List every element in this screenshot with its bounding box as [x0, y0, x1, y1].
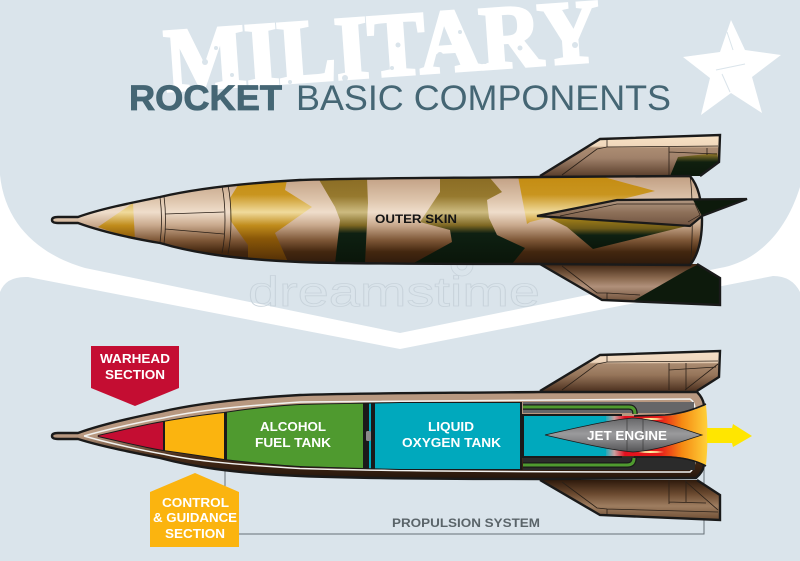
- callout: warhead section: [91, 346, 179, 406]
- callout: control and guidance section: SECTION: [165, 526, 225, 541]
- warhead compartment: [98, 422, 163, 450]
- callout: warhead section: SECTION: [105, 367, 165, 382]
- label: liquid oxygen tank: OXYGEN TANK: [402, 435, 502, 450]
- alcohol fuel tank: [227, 404, 363, 468]
- rocket body with camouflage: [52, 176, 702, 265]
- label: liquid oxygen tank: LIQUID: [428, 419, 474, 434]
- bottom tail fin: [540, 480, 720, 520]
- middle tail fin: [537, 199, 747, 226]
- guidance compartment: [165, 413, 224, 459]
- fuel pipes: [523, 407, 635, 465]
- title: rocket basic components: [129, 79, 671, 118]
- label: alcohol fuel tank: ALCOHOL: [260, 419, 326, 434]
- title: rocket basic components: ROCKET: [129, 79, 282, 118]
- callout: control and guidance section: & GUIDANCE: [153, 510, 237, 525]
- rocket: cutaway view: [52, 351, 752, 520]
- title: rocket basic components: BASIC COMPONENTS: [296, 79, 671, 118]
- callout: control and guidance section: [150, 473, 239, 547]
- engine bay: [522, 402, 708, 470]
- label: liquid oxygen tank: [402, 419, 502, 450]
- label: alcohol fuel tank: [255, 419, 332, 450]
- label: outer skin: OUTER SKIN: [375, 212, 457, 226]
- watermark: [248, 254, 540, 315]
- label: jet engine: JET ENGINE: [587, 428, 667, 443]
- lower background panel: [0, 276, 800, 561]
- arrow: thrust: [707, 424, 752, 447]
- callout: warhead section: WARHEAD: [100, 351, 170, 366]
- flame highlights: [638, 418, 664, 453]
- top tail fin: [540, 135, 720, 176]
- jet engine cone: [545, 418, 702, 452]
- compartments: [96, 400, 521, 472]
- rocket: exterior view: [52, 135, 747, 305]
- label: alcohol fuel tank: FUEL TANK: [255, 435, 332, 450]
- label: propulsion system: PROPULSION SYSTEM: [392, 516, 540, 530]
- watermark: dreamstime: [248, 268, 540, 315]
- propulsion system bracket: [225, 468, 704, 534]
- liquid oxygen tank: [375, 400, 520, 472]
- exhaust flame: [606, 405, 708, 465]
- rocket shell: [52, 392, 704, 479]
- upper background panel: [0, 0, 800, 333]
- top tail fin: [540, 351, 720, 391]
- bottom tail fin: [540, 264, 720, 305]
- callout: control and guidance section: CONTROL: [162, 495, 229, 510]
- icon: distressed star: [683, 20, 781, 115]
